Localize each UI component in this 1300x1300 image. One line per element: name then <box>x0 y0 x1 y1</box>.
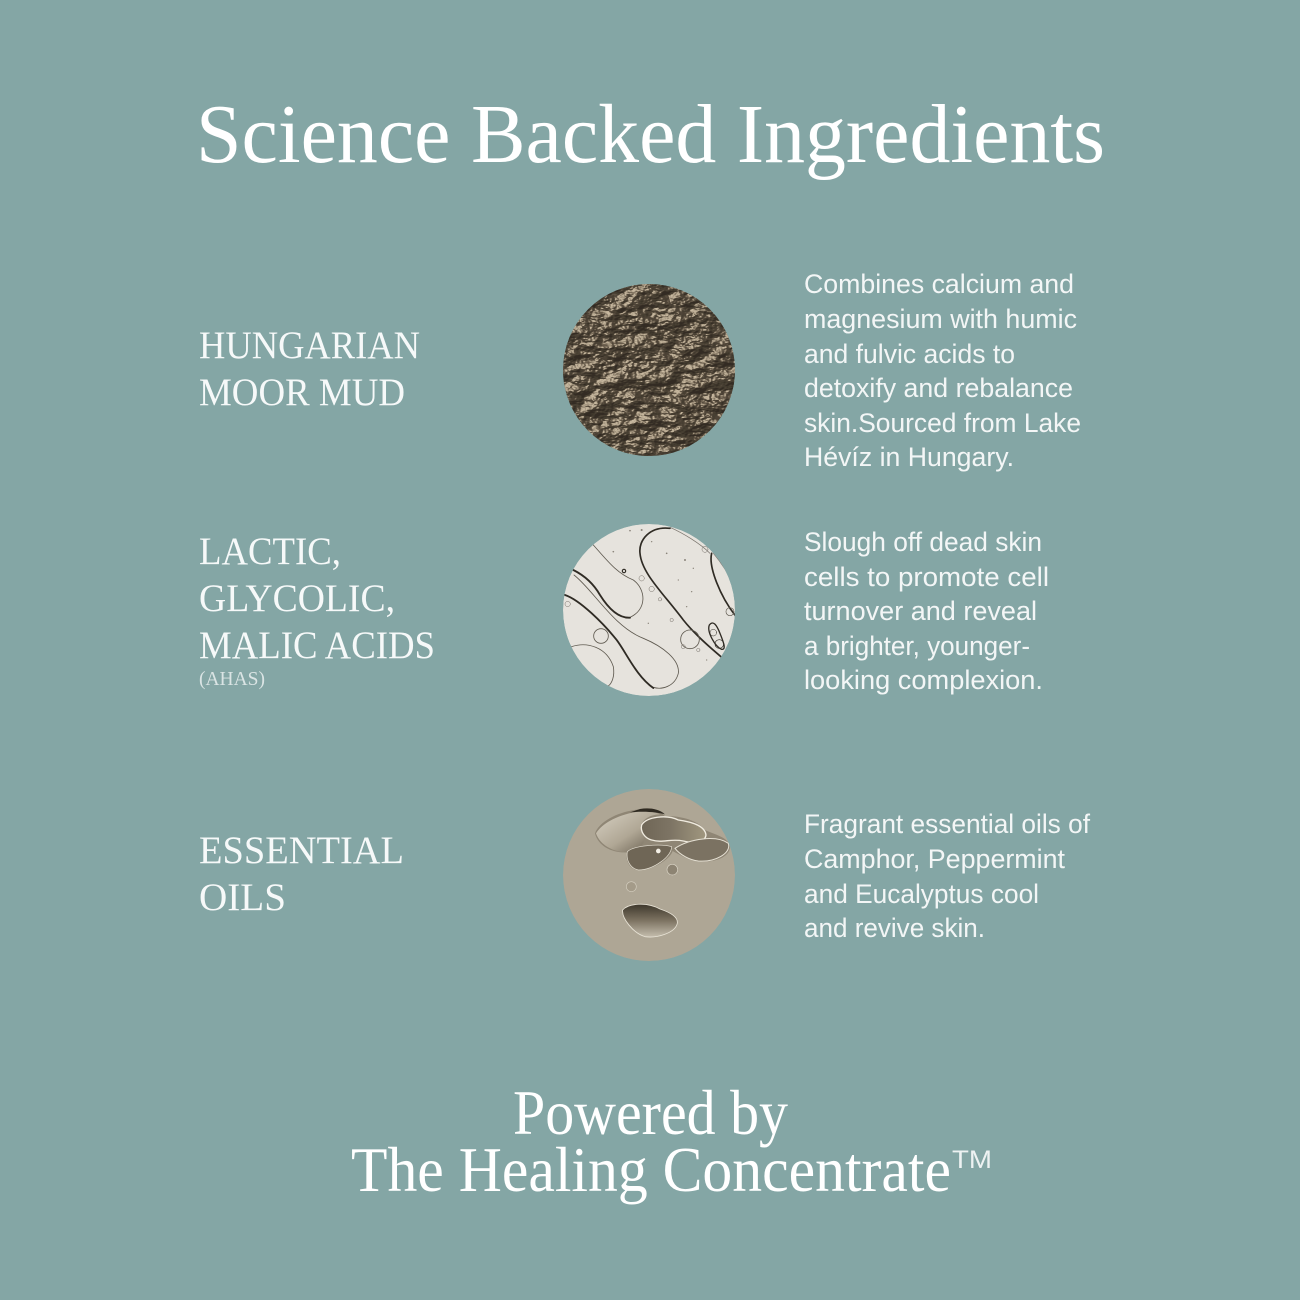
description: essential oils: and Eucalyptus cool <box>804 879 1039 909</box>
footer: powered by <box>351 1077 992 1205</box>
description: essential oils: and revive skin. <box>804 913 985 943</box>
description: acids: a brighter, younger- <box>804 631 1030 661</box>
description: Hungarian moor mud <box>804 269 1081 472</box>
icon: acids bubble circle <box>563 524 737 696</box>
label: Hungarian moor mud <box>199 324 420 414</box>
description: Hungarian moor mud: Combines calcium and <box>804 269 1074 299</box>
description: acids: turnover and reveal <box>804 596 1037 626</box>
description: Hungarian moor mud: detoxify and rebalance <box>804 373 1073 403</box>
description: essential oils <box>804 809 1090 943</box>
label: lactic, glycolic, malic acids: MALIC ACIDS <box>199 624 435 667</box>
description: Hungarian moor mud: magnesium with humic <box>804 304 1077 334</box>
description: acids: cells to promote cell <box>804 562 1049 592</box>
label: essential oils: OILS <box>199 876 286 919</box>
description: acids: Slough off dead skin <box>804 527 1042 557</box>
label: lactic, glycolic, malic acids: (AHAS) <box>199 668 265 690</box>
label: Hungarian moor mud: MOOR MUD <box>199 371 405 414</box>
label: essential oils <box>199 829 404 919</box>
footer: powered by: TM <box>952 1146 992 1174</box>
footer: powered by: The Healing Concentrate <box>351 1134 951 1205</box>
description: essential oils: Camphor, Peppermint <box>804 844 1065 874</box>
footer: powered by: Powered by <box>513 1077 788 1148</box>
description: Hungarian moor mud: Hévíz in Hungary. <box>804 442 1014 472</box>
description: essential oils: Fragrant essential oils of <box>804 809 1090 839</box>
description: Hungarian moor mud: and fulvic acids to <box>804 339 1015 369</box>
label: essential oils: ESSENTIAL <box>199 829 404 872</box>
title: Science Backed Ingredients <box>196 88 1105 181</box>
label: lactic, glycolic, malic acids: GLYCOLIC, <box>199 577 395 620</box>
label: lactic, glycolic, malic acids: LACTIC, <box>199 530 341 573</box>
label: Hungarian moor mud: HUNGARIAN <box>199 324 420 367</box>
description: acids <box>804 527 1049 695</box>
icon: moor mud texture circle <box>563 284 735 456</box>
icon: essential oil drops circle <box>563 789 735 961</box>
description: acids: looking complexion. <box>804 665 1043 695</box>
label: lactic, glycolic, malic acids <box>199 530 435 690</box>
description: Hungarian moor mud: skin.Sourced from Lake <box>804 408 1081 438</box>
